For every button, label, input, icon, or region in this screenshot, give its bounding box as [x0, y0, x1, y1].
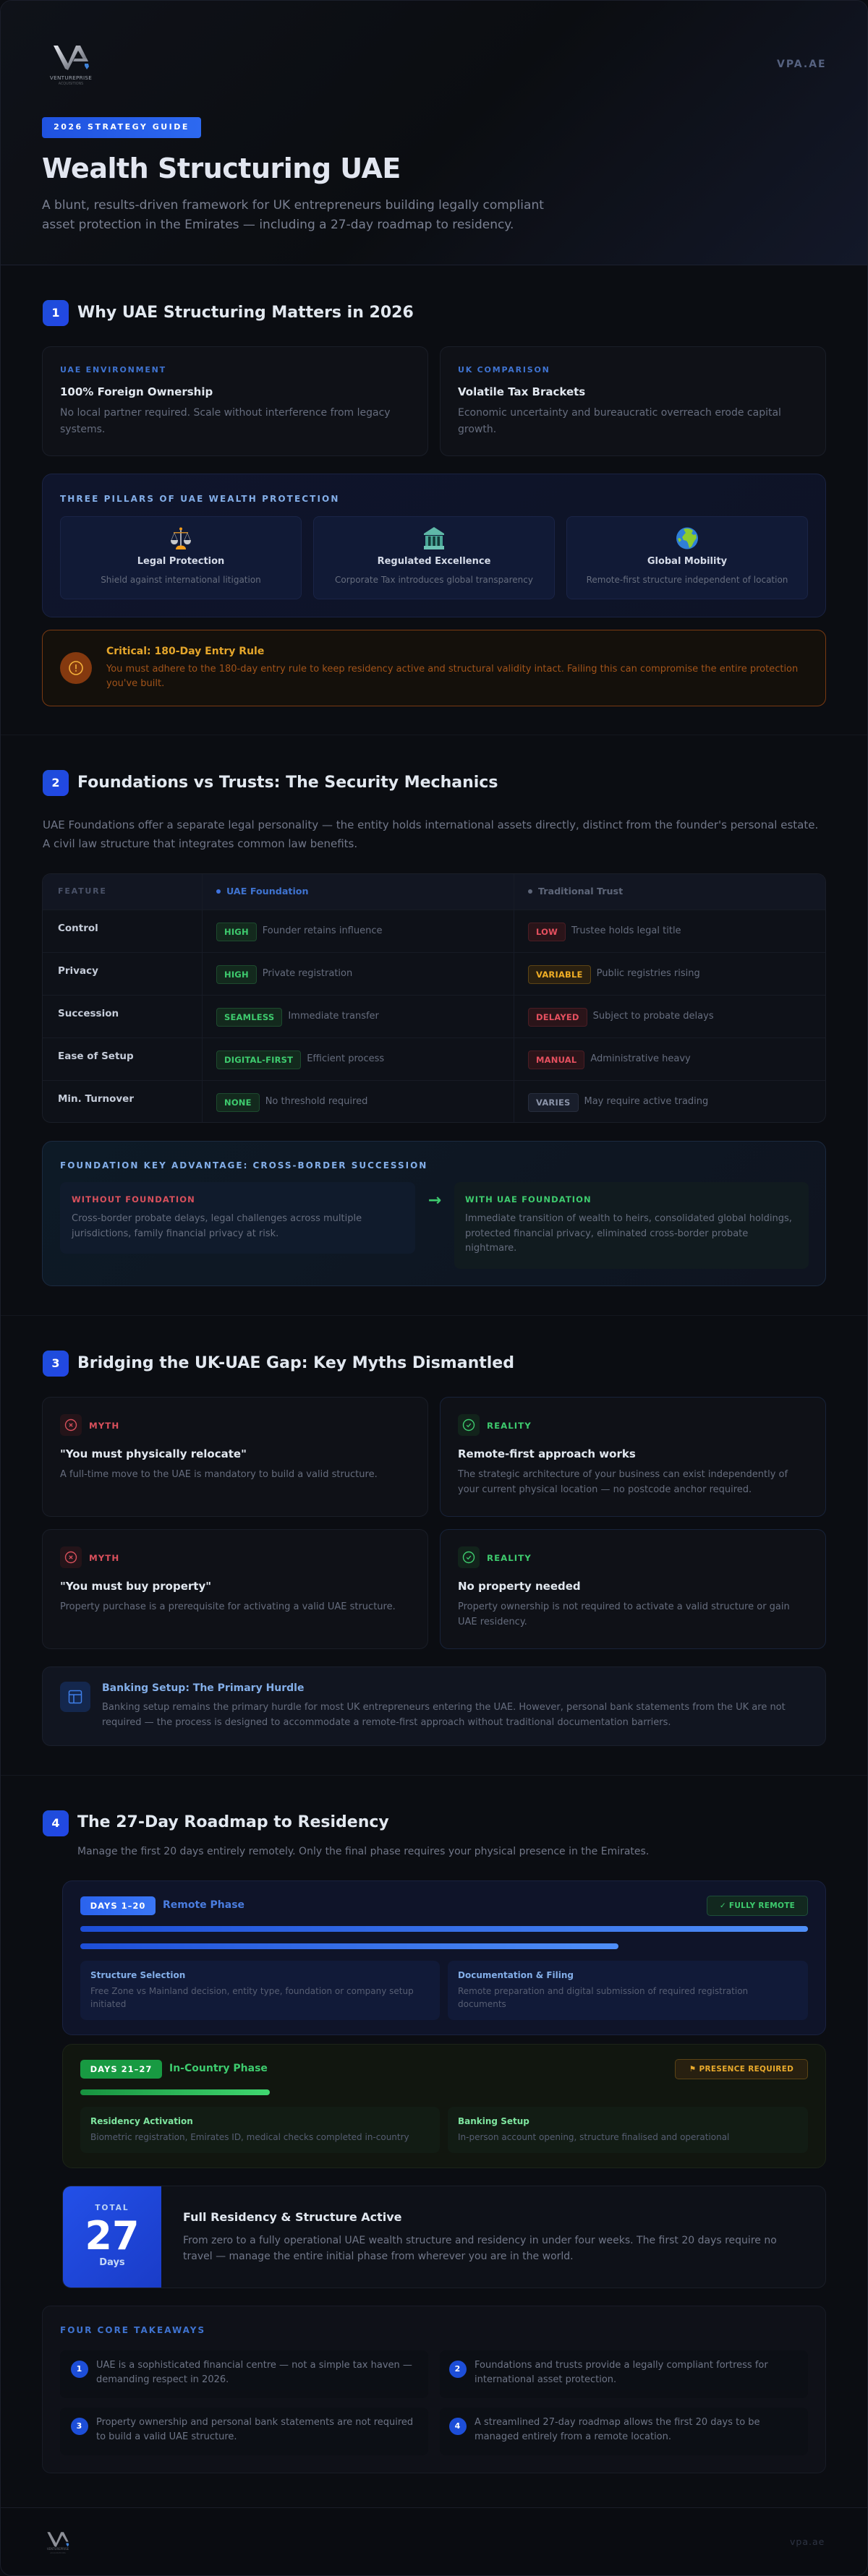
trust cell: Trustee holds legal title	[571, 925, 681, 936]
section 1 heading: Why UAE Structuring Matters in 2026	[77, 304, 414, 322]
foundation cell	[216, 1093, 367, 1112]
site tag: VPA.AE	[777, 59, 827, 70]
number badge: 2	[455, 2364, 460, 2374]
section 3 number	[43, 1351, 69, 1377]
reality text	[458, 1469, 788, 1495]
progress bar	[80, 2089, 269, 2095]
callout title: Critical: 180-Day Entry Rule	[106, 646, 264, 657]
pillar text: Shield against international litigation	[101, 575, 261, 585]
progress bar: full	[80, 1926, 808, 1932]
status tag: ✓ FULLY REMOTE	[720, 1901, 795, 1910]
step text: documents	[458, 1999, 506, 2009]
result title: Full Residency & Structure Active	[183, 2210, 402, 2224]
foundation cell: Private registration	[263, 968, 352, 979]
total number: 27	[85, 2213, 140, 2259]
section 2 number	[43, 770, 69, 796]
section 1 number: 1	[51, 306, 60, 320]
with foundation box	[454, 1182, 809, 1269]
footer link: vpa.ae	[790, 2536, 825, 2547]
takeaway 1	[60, 2350, 428, 2398]
takeaway text: A streamlined 27-day roadmap allows the first 20 days to be	[475, 2417, 760, 2428]
takeaway text	[475, 2360, 768, 2385]
section 4 number: 4	[51, 1816, 60, 1830]
without label: WITHOUT FOUNDATION	[72, 1194, 195, 1204]
number badge	[71, 2361, 88, 2378]
section 2 heading: Foundations vs Trusts: The Security Mechanics	[77, 774, 498, 792]
number badge	[448, 2361, 466, 2378]
step: banking setup	[448, 2107, 808, 2153]
card: UAE environment	[42, 346, 428, 456]
card: UK comparison	[440, 346, 826, 456]
pillar: regulated excellence	[313, 516, 555, 599]
step text: Remote preparation and digital submission of required registration	[458, 1986, 748, 1996]
card text: No local partner required. Scale without interference from legacy	[60, 407, 391, 419]
myth title: "You must buy property"	[60, 1580, 211, 1593]
reality text: The strategic architecture of your business can exist independently of	[458, 1469, 788, 1480]
myth text: Property purchase is a prerequisite for activating a valid UAE structure.	[60, 1601, 396, 1612]
pillar title: Legal Protection	[137, 556, 224, 567]
icon: scales	[171, 528, 191, 549]
step: residency activation	[80, 2107, 440, 2153]
step: documentation	[448, 1961, 808, 2020]
total label: TOTAL	[95, 2204, 129, 2212]
row: succession	[43, 995, 825, 1037]
pillar text: Corporate Tax introduces global transparency	[335, 575, 533, 585]
reality text: Property ownership is not required to activate a valid structure or gain	[458, 1601, 790, 1612]
section 4 heading: The 27-Day Roadmap to Residency	[77, 1813, 389, 1831]
foundation cell: Immediate transfer	[288, 1011, 379, 1022]
step text: Biometric registration, Emirates ID, medical checks completed in-country	[90, 2132, 409, 2142]
panel: banking setup	[42, 1666, 826, 1746]
phase title: In-Country Phase	[169, 2063, 268, 2074]
phase title: Remote Phase	[163, 1899, 244, 1911]
panel: three pillars	[42, 474, 826, 617]
row label: Succession	[58, 1008, 119, 1019]
number badge: 1	[77, 2364, 82, 2374]
trust cell: Public registries rising	[597, 968, 700, 979]
logo: ACQUISITIONS	[59, 82, 83, 86]
days badge	[80, 1896, 156, 1915]
comparison table	[42, 873, 826, 1123]
number badge: 3	[77, 2421, 82, 2431]
section 4 intro: Manage the first 20 days entirely remotely. Only the final phase requires your physical presence in the Emirates.	[77, 1846, 649, 1857]
section 2 intro: UAE Foundations offer a separate legal personality — the entity holds international assets directly, distinct from the founder's personal estate.	[43, 818, 818, 831]
banking title: Banking Setup: The Primary Hurdle	[102, 1682, 304, 1694]
myth title: "You must physically relocate"	[60, 1447, 247, 1460]
without text: jurisdictions, family financial privacy at risk.	[72, 1228, 278, 1239]
days label: Days	[99, 2257, 125, 2268]
section 2 intro: A civil law structure that integrates common law benefits.	[43, 837, 357, 850]
step title: Structure Selection	[90, 1970, 185, 1980]
card text: growth.	[458, 424, 496, 435]
without foundation box	[60, 1182, 415, 1254]
callout text: You must adhere to the 180-day entry rule to keep residency active and structural validity intact. Failing this can compromise the entire protection	[106, 664, 798, 675]
callout text: you've built.	[106, 678, 164, 689]
row: minimum turnover	[43, 1080, 825, 1123]
trust cell	[528, 1050, 691, 1069]
card text: systems.	[60, 424, 105, 435]
days badge: DAYS 21–27	[90, 2064, 152, 2074]
foundation cell: Founder retains influence	[263, 925, 382, 936]
row: ease of setup	[43, 1037, 825, 1080]
banking text: Banking setup remains the primary hurdle for most UK entrepreneurs entering the UAE. However, personal bank statements from the UK are not	[102, 1702, 786, 1713]
number badge: 4	[455, 2421, 460, 2431]
icon: institution	[424, 527, 444, 549]
step title: Banking Setup	[458, 2116, 529, 2126]
takeaway 3	[60, 2408, 428, 2455]
traditional trust column header: Traditional Trust	[538, 886, 623, 897]
pillar title: Global Mobility	[647, 556, 727, 567]
phase: remote	[62, 1880, 826, 2035]
subtitle	[42, 198, 544, 232]
result text	[183, 2235, 777, 2262]
takeaway text	[475, 2417, 760, 2442]
guide badge	[42, 117, 201, 138]
foundation cell: NONE	[224, 1097, 252, 1108]
number badge	[448, 2418, 466, 2435]
section 2 number: 2	[51, 776, 60, 790]
takeaway text: international asset protection.	[475, 2374, 616, 2385]
takeaways heading: FOUR CORE TAKEAWAYS	[60, 2325, 205, 2335]
total days block	[63, 2186, 161, 2288]
card text: Economic uncertainty and bureaucratic overreach erode capital	[458, 407, 781, 419]
reality label: REALITY	[487, 1553, 532, 1563]
myth label: MYTH	[89, 1421, 119, 1431]
trust cell: Administrative heavy	[590, 1053, 691, 1064]
icon: cross	[60, 1546, 82, 1568]
trust cell: VARIABLE	[536, 970, 583, 980]
step text: Free Zone vs Mainland decision, entity type, foundation or company setup	[90, 1986, 414, 1996]
days badge	[80, 2060, 162, 2079]
step: structure selection	[80, 1961, 440, 2020]
card label: UAE ENVIRONMENT	[60, 365, 166, 375]
icon: check	[458, 1546, 480, 1568]
step text: In-person account opening, structure finalised and operational	[458, 2132, 729, 2142]
with text: Immediate transition of wealth to heirs, consolidated global holdings,	[465, 1213, 792, 1224]
trust cell: MANUAL	[536, 1055, 576, 1065]
myth label: MYTH	[89, 1553, 119, 1563]
takeaway text: demanding respect in 2026.	[96, 2374, 229, 2385]
foundation cell: DIGITAL-FIRST	[224, 1055, 293, 1065]
status tag	[675, 2059, 808, 2079]
card title: 100% Foreign Ownership	[60, 385, 213, 398]
subtitle: A blunt, results-driven framework for UK entrepreneurs building legally compliant	[42, 198, 544, 213]
trust cell	[528, 965, 700, 984]
result text: From zero to a fully operational UAE wealth structure and residency in under four weeks. The first 20 days require no	[183, 2235, 777, 2246]
takeaway 2	[440, 2350, 808, 2398]
takeaway text	[96, 2360, 412, 2385]
UAE foundation column header: UAE Foundation	[226, 886, 309, 897]
takeaway text: Foundations and trusts provide a legally compliant fortress for	[475, 2360, 768, 2371]
myth text: A full-time move to the UAE is mandatory to build a valid structure.	[60, 1469, 378, 1480]
feature column header: FEATURE	[58, 886, 107, 896]
section 3 number: 3	[51, 1356, 60, 1370]
with text: nightmare.	[465, 1243, 516, 1254]
hero header	[0, 0, 868, 265]
card text	[60, 407, 391, 435]
pillar text: Remote-first structure independent of location	[587, 575, 788, 585]
reality text: your current physical location — no postcode anchor required.	[458, 1484, 752, 1495]
card label: UK COMPARISON	[458, 365, 550, 375]
without text: Cross-border probate delays, legal challenges across multiple	[72, 1213, 362, 1224]
panel: foundation key advantage	[42, 1141, 826, 1286]
callout text	[106, 664, 798, 689]
foundation cell	[216, 1008, 379, 1027]
foundation cell: No threshold required	[265, 1096, 367, 1107]
reality title: No property needed	[458, 1580, 581, 1593]
foundation cell	[216, 965, 352, 984]
step text	[90, 1986, 414, 2009]
subtitle: asset protection in the Emirates — including a 27-day roadmap to residency.	[42, 218, 514, 232]
footer logo: VENTUREPRISE	[47, 2547, 69, 2551]
with text	[465, 1213, 792, 1254]
icon: cross	[60, 1414, 82, 1436]
guide badge: 2026 STRATEGY GUIDE	[54, 122, 190, 132]
banking text	[102, 1702, 786, 1728]
trust cell	[528, 923, 681, 941]
step title: Residency Activation	[90, 2116, 193, 2126]
takeaway text: Property ownership and personal bank statements are not required	[96, 2417, 413, 2428]
takeaway text: managed entirely from a remote location.	[475, 2431, 671, 2442]
without text	[71, 1213, 362, 1239]
trust cell: DELAYED	[536, 1012, 579, 1022]
logo	[50, 46, 92, 86]
step title: Documentation & Filing	[458, 1970, 574, 1980]
footer	[0, 2507, 868, 2576]
status tag: ⚑ PRESENCE REQUIRED	[689, 2065, 793, 2074]
foundation cell: SEAMLESS	[224, 1012, 274, 1022]
with label: WITH UAE FOUNDATION	[465, 1194, 592, 1204]
takeaway 4	[440, 2408, 808, 2455]
days badge: DAYS 1–20	[90, 1901, 145, 1911]
section 2 intro	[43, 818, 818, 850]
takeaway text: UAE is a sophisticated financial centre — not a simple tax haven —	[96, 2360, 412, 2371]
pillar: global mobility	[566, 516, 808, 599]
trust cell: Subject to probate delays	[593, 1011, 714, 1022]
pillar: legal protection	[60, 516, 302, 599]
with text: protected financial privacy, eliminated cross-border probate	[465, 1228, 748, 1239]
trust cell	[528, 1008, 714, 1027]
step text	[458, 1986, 748, 2009]
icon: check	[458, 1414, 480, 1436]
step text: initiated	[90, 1999, 126, 2009]
section 1 number	[43, 300, 69, 326]
foundation cell: HIGH	[224, 970, 249, 980]
footer logo: ACQUISITIONS	[50, 2551, 66, 2554]
advantage heading: FOUNDATION KEY ADVANTAGE: CROSS-BORDER SUCCESSION	[60, 1160, 427, 1171]
title: Wealth Structuring UAE	[42, 153, 401, 184]
pillars heading: THREE PILLARS OF UAE WEALTH PROTECTION	[60, 494, 339, 504]
total days panel	[62, 2186, 826, 2288]
section 3 heading: Bridging the UK-UAE Gap: Key Myths Dismantled	[77, 1354, 514, 1372]
row label: Privacy	[58, 965, 98, 977]
reality title: Remote-first approach works	[458, 1447, 636, 1460]
icon: warning	[60, 652, 92, 684]
status tag	[707, 1896, 808, 1916]
pillar title: Regulated Excellence	[378, 556, 490, 567]
phase: in-country	[62, 2044, 826, 2168]
callout: 180-day rule	[42, 630, 826, 706]
number badge	[71, 2418, 88, 2435]
banking text: required — the process is designed to accommodate a remote-first approach without traditional documentation barriers.	[102, 1717, 671, 1728]
trust cell: VARIES	[536, 1097, 570, 1108]
myth card 2	[42, 1529, 428, 1649]
row label: Ease of Setup	[58, 1050, 134, 1062]
myth card 1	[42, 1397, 428, 1517]
trust cell: LOW	[536, 927, 558, 937]
foundation cell: Efficient process	[307, 1053, 384, 1064]
card text	[458, 407, 781, 435]
panel: four core takeaways	[42, 2306, 826, 2473]
arrow: →	[428, 1191, 441, 1210]
foundation cell: HIGH	[224, 927, 249, 937]
row: control	[43, 910, 825, 952]
row: privacy	[43, 952, 825, 995]
takeaway text: to build a valid UAE structure.	[96, 2431, 237, 2442]
progress bar: partial	[80, 1943, 618, 1949]
reality card 2	[440, 1529, 826, 1649]
result text: travel — manage the entire initial phase from wherever you are in the world.	[183, 2251, 574, 2262]
section 4 number	[43, 1810, 69, 1836]
trust cell	[528, 1093, 708, 1112]
row label: Min. Turnover	[58, 1093, 134, 1105]
icon: bank document	[60, 1682, 90, 1712]
reality text	[458, 1601, 790, 1627]
table header	[43, 874, 825, 910]
logo: VENTUREPRISE	[50, 74, 92, 81]
icon: globe	[676, 528, 698, 549]
trust cell: May require active trading	[584, 1096, 708, 1107]
footer logo	[47, 2532, 69, 2554]
card title: Volatile Tax Brackets	[458, 385, 585, 398]
foundation cell	[216, 923, 382, 941]
reality card 1	[440, 1397, 826, 1517]
row label: Control	[58, 923, 98, 934]
reality label: REALITY	[487, 1421, 532, 1431]
reality text: UAE residency.	[458, 1617, 527, 1627]
takeaway text	[96, 2417, 413, 2442]
foundation cell	[216, 1050, 384, 1069]
